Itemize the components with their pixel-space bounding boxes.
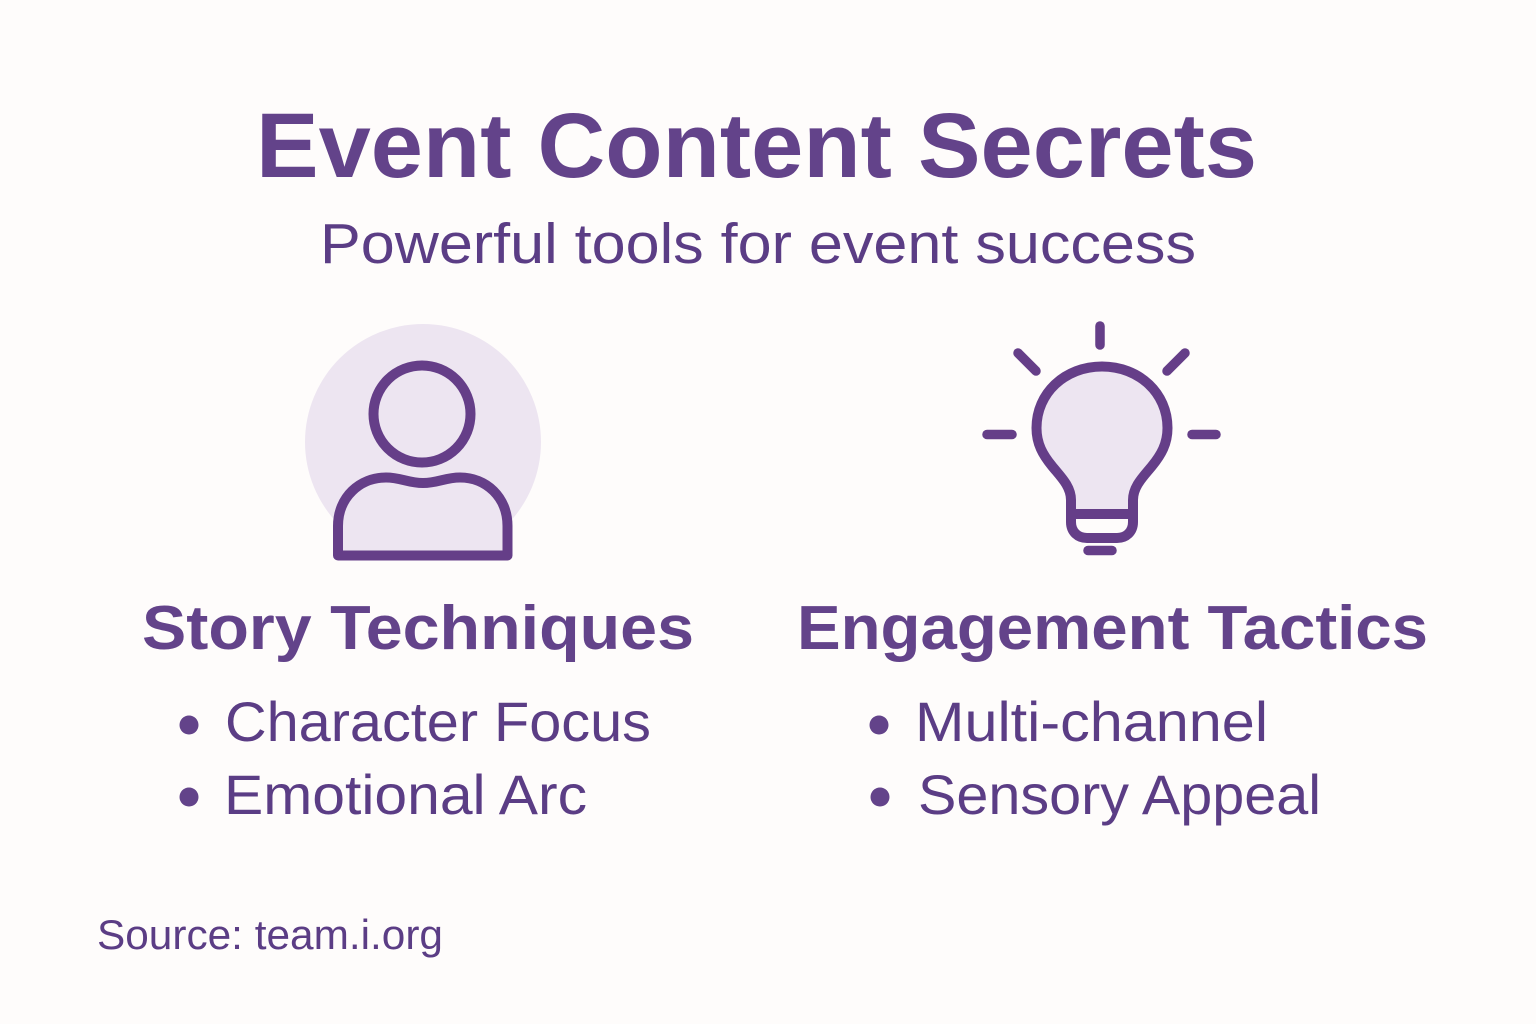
list: story techniques: Emotional Arc (224, 763, 587, 826)
list: story techniques: Character Focus (225, 690, 651, 753)
subtitle: Powerful tools for event success (320, 212, 1196, 276)
list: story techniques (180, 690, 651, 826)
title: Event Content Secrets (256, 95, 1257, 197)
list: engagement tactics: Multi-channel (915, 690, 1268, 753)
icon: light bulb (987, 326, 1216, 550)
source: Source: team.i.org (97, 911, 443, 958)
list: engagement tactics (870, 690, 1321, 826)
heading: Story Techniques: Story Techniques (142, 594, 694, 663)
heading: Engagement Tactics: Engagement Tactics (797, 594, 1428, 663)
list: engagement tactics: Sensory Appeal (918, 763, 1321, 826)
icon: person in circle (305, 324, 541, 560)
